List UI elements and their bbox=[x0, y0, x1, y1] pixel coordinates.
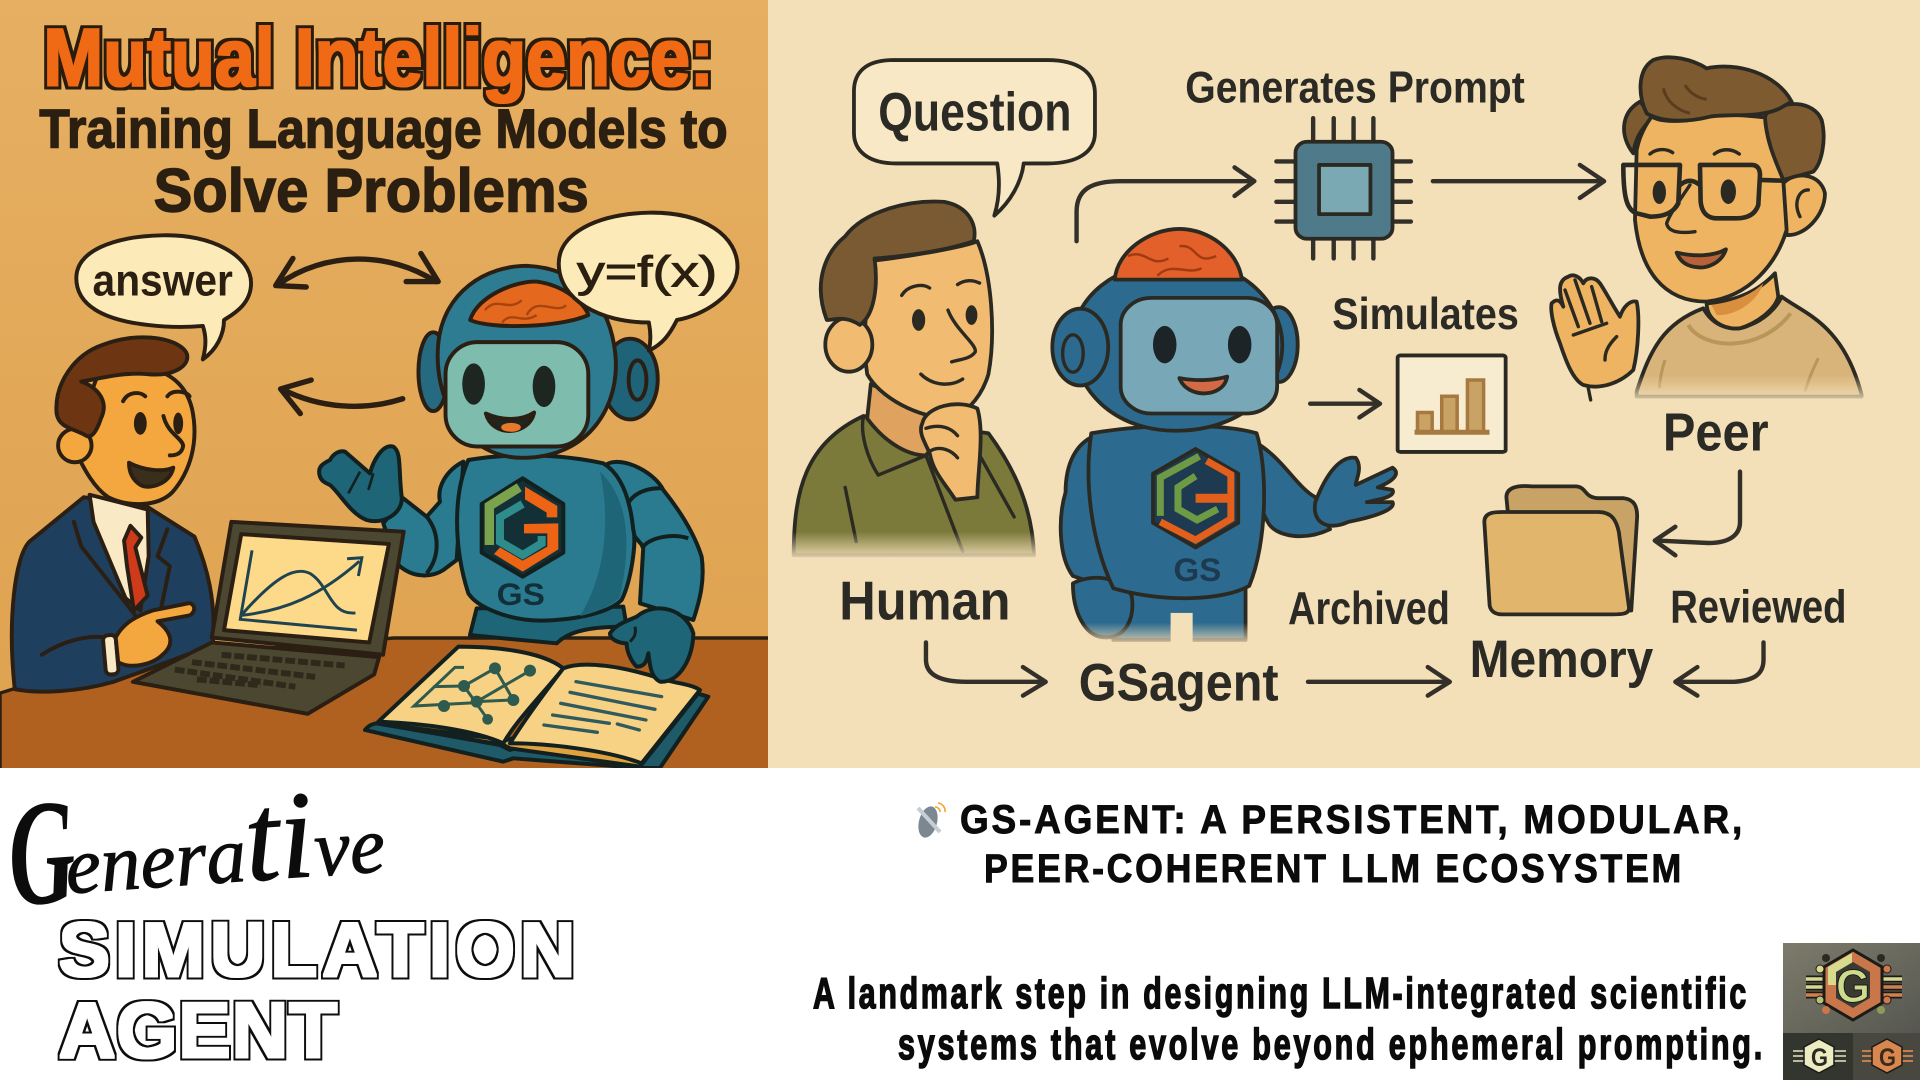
robot left ear bbox=[1052, 309, 1108, 385]
peer figure bbox=[1551, 57, 1870, 403]
shirt cuff bbox=[103, 635, 119, 675]
robot eyes bbox=[462, 363, 555, 407]
torso shading bbox=[580, 472, 626, 616]
eyes and brows bbox=[123, 392, 190, 435]
icon: chip bbox=[1276, 118, 1411, 258]
eyes, brows, nose, mouth bbox=[902, 281, 980, 384]
shirt bbox=[90, 495, 149, 610]
book cover bbox=[365, 693, 708, 768]
speech bubble: answer bbox=[76, 235, 251, 359]
table bbox=[0, 638, 770, 770]
robot raised arm bbox=[383, 462, 463, 575]
bottom fade bbox=[1630, 375, 1870, 403]
robot torso bbox=[457, 455, 634, 621]
large logo tile: G bbox=[1836, 960, 1870, 1012]
icon: bar chart bbox=[1398, 355, 1506, 452]
robot lower torso bbox=[470, 607, 627, 643]
ear bbox=[1783, 176, 1825, 235]
icon: satellite dish bbox=[915, 803, 945, 840]
jacket lapels bbox=[42, 522, 170, 655]
ear bbox=[825, 318, 872, 372]
face bbox=[1635, 115, 1787, 302]
left page bbox=[378, 647, 563, 743]
arrow: human to GSagent bbox=[926, 642, 1046, 696]
speech bubble: y=f(x): y=f(x) bbox=[577, 249, 717, 297]
book text lines bbox=[544, 682, 662, 732]
waving hand bbox=[1551, 275, 1638, 400]
robot mouth bbox=[1179, 377, 1227, 393]
keyboard keys bbox=[175, 655, 345, 687]
businessman bbox=[12, 337, 214, 692]
GS logo bbox=[482, 478, 563, 577]
robot mouth bbox=[486, 413, 534, 432]
mouth bbox=[1677, 249, 1726, 267]
brand title: Generative: G bbox=[3, 768, 80, 938]
neck shadow bbox=[1712, 283, 1763, 315]
robot arm joints bbox=[625, 488, 688, 548]
tie bbox=[124, 526, 148, 610]
neck bbox=[1707, 273, 1778, 328]
sweater collar bbox=[1688, 313, 1791, 344]
label: GSagent: GSagent bbox=[1079, 653, 1279, 712]
hand on chin bbox=[921, 404, 981, 500]
arrow: agent to chart bbox=[1310, 390, 1380, 417]
open book and robot hand bbox=[365, 608, 708, 768]
arrow: peer to folder bbox=[1655, 472, 1740, 555]
logo panel bbox=[1783, 943, 1920, 1080]
bottom fade bbox=[783, 532, 1047, 560]
laptop chart bbox=[240, 550, 362, 630]
label: Archived: Archived bbox=[1288, 582, 1450, 634]
back hair bbox=[1765, 104, 1824, 180]
hair strands bbox=[1663, 85, 1707, 113]
hair bbox=[56, 337, 187, 436]
robot brain bbox=[470, 282, 588, 326]
suit jacket bbox=[12, 497, 214, 692]
speech bubble: answer: answer bbox=[93, 256, 233, 305]
question speech bubble: Question bbox=[878, 81, 1071, 142]
panel: workflow illustration bbox=[768, 0, 1920, 770]
robot right arm bbox=[603, 462, 703, 620]
speech bubble: y=f(x) bbox=[559, 213, 737, 351]
robot brain bbox=[1115, 229, 1242, 280]
neck bbox=[867, 384, 952, 455]
robot right ear bbox=[1260, 307, 1298, 382]
brand title: Generative bbox=[3, 746, 389, 938]
icon: memory folder bbox=[1484, 486, 1637, 614]
robot left hand bbox=[1073, 578, 1132, 638]
hair bbox=[821, 202, 975, 325]
subtitle line: Training Language Models to: Training Language Models to bbox=[39, 98, 728, 160]
glasses bbox=[1623, 165, 1783, 218]
robot head bbox=[1073, 261, 1282, 431]
label: Generates Prompt: Generates Prompt bbox=[1185, 62, 1525, 112]
left hair bbox=[1624, 102, 1653, 153]
heading: GS-Agent line two: PEER-COHERENT LLM ECOSYSTEM bbox=[984, 847, 1684, 891]
robot face screen bbox=[446, 342, 588, 447]
right page bbox=[510, 665, 700, 763]
eyes and brows bbox=[1650, 150, 1739, 204]
mouth bbox=[129, 463, 173, 487]
robot legs bbox=[1113, 586, 1246, 640]
robot eyes bbox=[1153, 326, 1251, 363]
arrow: robot back to human bbox=[281, 380, 403, 414]
laptop base bbox=[133, 642, 379, 714]
label: Simulates: Simulates bbox=[1332, 289, 1519, 338]
heading: GS-Agent line one: GS-AGENT: A PERSISTENT, MODULAR, bbox=[960, 798, 1745, 842]
laptop screen bezel bbox=[212, 522, 404, 655]
robot head bbox=[418, 266, 658, 458]
top hair bbox=[1641, 57, 1792, 121]
brand title: Generative: enerative bbox=[60, 761, 388, 921]
label: Peer: Peer bbox=[1663, 402, 1769, 462]
shirt collar bbox=[845, 416, 1014, 551]
arrow: chip to peer bbox=[1433, 165, 1604, 198]
label: Human: Human bbox=[839, 570, 1010, 631]
nose bbox=[1667, 185, 1695, 232]
brand title: AGENT: AGENT bbox=[59, 986, 337, 1074]
shirt bbox=[794, 416, 1034, 555]
head bbox=[79, 364, 194, 504]
label: Memory: Memory bbox=[1470, 630, 1654, 689]
sweater folds bbox=[1659, 358, 1818, 392]
book network diagram bbox=[414, 662, 536, 725]
small copper logo tile: G bbox=[1879, 1044, 1896, 1072]
robot open hand bbox=[1315, 458, 1396, 526]
sweater bbox=[1637, 297, 1862, 397]
bottom fade bbox=[1062, 623, 1268, 647]
arrow: two-way exchange bbox=[276, 254, 438, 287]
small light logo tile: G bbox=[1811, 1044, 1828, 1072]
arrow: agent to chip bbox=[1077, 167, 1254, 241]
robot face screen bbox=[1121, 298, 1277, 414]
panel background bbox=[0, 0, 770, 770]
robot left ear bbox=[418, 332, 448, 411]
panel background bbox=[768, 0, 1920, 770]
robot headphone bbox=[603, 339, 658, 419]
page edges bbox=[377, 687, 698, 767]
leg gap bbox=[1171, 613, 1193, 642]
arrow: GSagent to memory bbox=[1308, 667, 1450, 696]
laptop screen bbox=[224, 534, 389, 642]
subtitle line: Solve Problems: Solve Problems bbox=[154, 157, 589, 226]
ear bbox=[58, 429, 92, 462]
panel: mutual intelligence illustration bbox=[0, 0, 770, 770]
robot raised hand bbox=[319, 446, 402, 521]
GS logo on chest bbox=[1153, 449, 1238, 547]
GS label: GS bbox=[497, 576, 545, 612]
human figure bbox=[783, 202, 1047, 560]
GSagent robot bbox=[1052, 229, 1396, 647]
robot right arm bbox=[1253, 443, 1330, 536]
robot resting hand bbox=[610, 608, 693, 682]
arrow: reviewed to memory bbox=[1675, 642, 1764, 696]
question speech bubble bbox=[854, 60, 1095, 216]
pointing hand bbox=[116, 603, 194, 666]
robot head shell bbox=[438, 266, 616, 458]
brand title: SIMULATION: SIMULATION bbox=[59, 908, 575, 993]
laptop bbox=[133, 522, 404, 714]
face bbox=[864, 241, 992, 418]
title: Mutual Intelligence: Mutual Intelligence: bbox=[43, 13, 714, 104]
robot body bbox=[319, 446, 703, 643]
bottom strip background bbox=[0, 768, 1920, 1080]
GS label: GS bbox=[1174, 552, 1221, 588]
robot left arm bbox=[1061, 436, 1115, 586]
nose bbox=[163, 416, 183, 455]
robot raised arm joint bbox=[427, 517, 437, 573]
robot torso bbox=[1089, 426, 1264, 598]
